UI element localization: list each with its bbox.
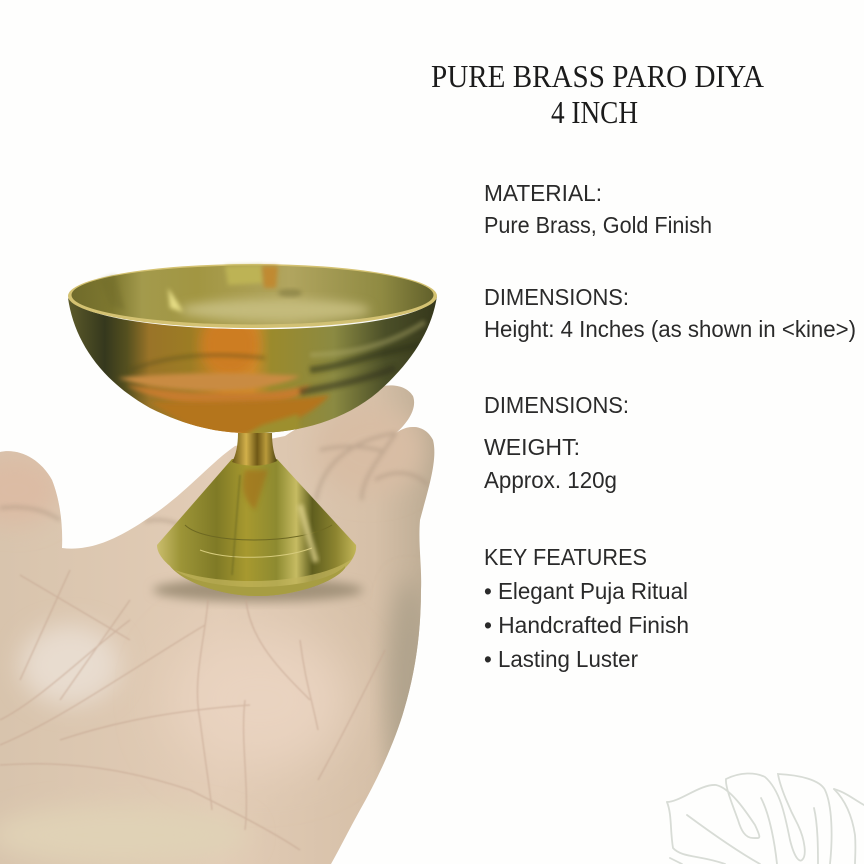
diya foot (150, 459, 360, 600)
diya bowl interior (72, 265, 434, 324)
title (431, 58, 764, 130)
diya stem (232, 433, 277, 466)
diya rim (68, 264, 437, 328)
title: PURE BRASS PARO DIYA (431, 58, 764, 94)
spec: key features: • Handcrafted Finish (484, 612, 689, 638)
finger joints and separations (0, 433, 428, 525)
spec: key features: • Lasting Luster (484, 646, 638, 672)
spec: weight: WEIGHT: (484, 434, 580, 460)
title: 4 INCH (551, 94, 638, 130)
spec: weight: Approx. 120g (484, 467, 617, 493)
spec: material (484, 180, 712, 238)
palm creases (0, 570, 385, 850)
spec: dimensions repeated heading: DIMENSIONS: (484, 392, 629, 418)
spec: material: Pure Brass, Gold Finish (484, 212, 712, 238)
spec: dimensions: Height: 4 Inches (as shown in <kine>) (484, 316, 856, 342)
spec: dimensions: DIMENSIONS: (484, 284, 629, 310)
hand (0, 380, 440, 864)
decorative leaf outline (667, 773, 864, 864)
spec: material: MATERIAL: (484, 180, 602, 206)
spec: dimensions (484, 284, 856, 342)
spec: weight (484, 434, 617, 493)
spec: key features: • Elegant Puja Ritual (484, 578, 688, 604)
photo: hand holding brass diya (0, 264, 440, 864)
spec: key features: KEY FEATURES (484, 544, 647, 570)
spec: key features (484, 544, 689, 672)
diya bowl outside (68, 296, 437, 438)
